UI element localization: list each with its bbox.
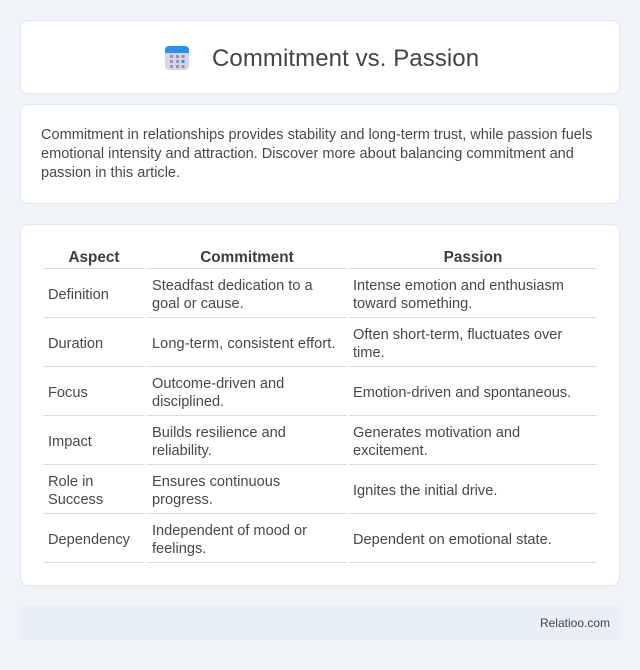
footer bar xyxy=(20,606,620,640)
row: Impact: excitement. xyxy=(353,443,428,459)
heading: Passion: Passion xyxy=(444,249,502,266)
row: Duration: time. xyxy=(353,345,385,361)
row: Impact: Impact xyxy=(48,434,92,450)
row: Definition: goal or cause. xyxy=(152,296,244,312)
row: Role in Success: Ignites the initial drive. xyxy=(353,483,497,499)
row: Focus: disciplined. xyxy=(152,394,224,410)
heading: Aspect: Aspect xyxy=(68,249,120,266)
intro text xyxy=(41,127,592,181)
row: Dependency xyxy=(48,523,552,557)
title: Commitment vs. Passion xyxy=(212,45,479,72)
row: Dependency: Independent of mood or xyxy=(152,523,307,539)
row: Definition xyxy=(48,278,564,312)
row: Impact xyxy=(48,425,520,459)
row: Role in Success: Ensures continuous xyxy=(152,474,280,490)
row: Focus xyxy=(48,376,571,410)
row: Role in Success: Success xyxy=(48,492,103,508)
row: Dependency: Dependent on emotional state. xyxy=(353,532,552,548)
intro text: emotional intensity and attraction. Discover more about balancing commitment and xyxy=(41,146,574,162)
row: Focus: Outcome-driven and xyxy=(152,376,284,392)
row: Definition: Steadfast dedication to a xyxy=(152,278,313,294)
row: Impact: reliability. xyxy=(152,443,212,459)
row: Duration: Duration xyxy=(48,336,103,352)
panel: introduction xyxy=(20,104,620,204)
row: Definition: Intense emotion and enthusiasm xyxy=(353,278,564,294)
row: Definition: Definition xyxy=(48,287,109,303)
row: Dependency: Dependency xyxy=(48,532,130,548)
row: Impact: Generates motivation and xyxy=(353,425,520,441)
icon: calendar xyxy=(165,46,189,70)
row: Duration xyxy=(48,327,562,361)
row: Role in Success: Role in xyxy=(48,474,93,490)
row: Focus: Emotion-driven and spontaneous. xyxy=(353,385,571,401)
row: Dependency: feelings. xyxy=(152,541,206,557)
row: Definition: toward something. xyxy=(353,296,472,312)
row: Focus: Focus xyxy=(48,385,88,401)
row: Duration: Long-term, consistent effort. xyxy=(152,336,335,352)
panel: title card xyxy=(20,20,620,94)
intro text: passion in this article. xyxy=(41,165,180,181)
intro text: Commitment in relationships provides stability and long-term trust, while passion fuels xyxy=(41,127,592,143)
heading: Commitment: Commitment xyxy=(200,249,294,266)
row: Impact: Builds resilience and xyxy=(152,425,286,441)
row: Duration: Often short-term, fluctuates over xyxy=(353,327,562,343)
row: Role in Success: progress. xyxy=(152,492,213,508)
footer text: Relatioo.com xyxy=(540,616,610,630)
row: Role in Success xyxy=(48,474,497,508)
